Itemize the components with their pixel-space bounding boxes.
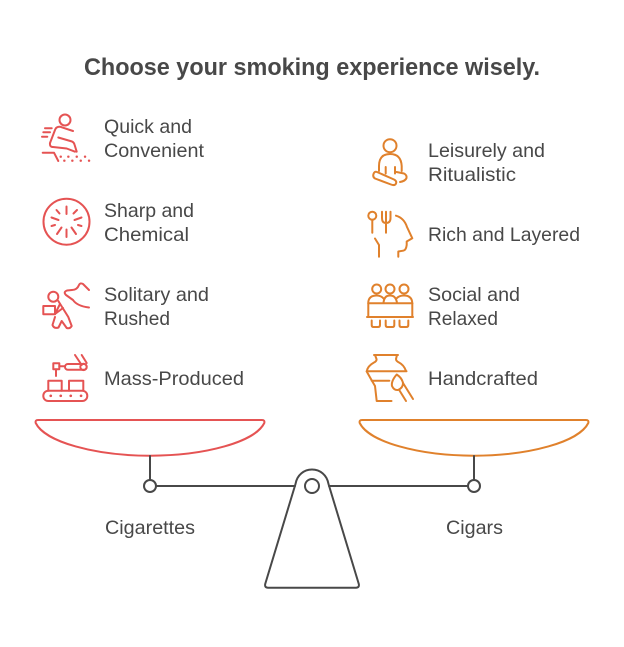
- text: solitary and rushed: Rushed: [104, 308, 170, 330]
- icon: rushed figure with box: [43, 283, 89, 328]
- text: social and relaxed: Relaxed: [428, 308, 498, 330]
- icon: conveyor with robot arm: [43, 355, 87, 401]
- scale: right pan: [360, 420, 588, 456]
- text: mass-produced: Mass-Produced: [104, 368, 244, 390]
- scale: beam and fulcrum: [144, 456, 480, 588]
- text: leisurely and ritualistic: [428, 140, 545, 186]
- text: quick and convenient: [104, 116, 205, 162]
- icon: head with spoon and fork: [368, 212, 412, 257]
- icon: sharp burst circle: [44, 199, 90, 245]
- title: Choose your smoking experience wisely.: [84, 54, 540, 81]
- text: sharp and chemical: Chemical: [104, 224, 189, 246]
- icon: people around table: [367, 284, 413, 327]
- text: sharp and chemical: Sharp and: [104, 200, 194, 222]
- text: rich and layered: Rich and Layered: [428, 224, 580, 246]
- text: quick and convenient: Convenient: [104, 140, 205, 162]
- label: cigars: Cigars: [446, 517, 503, 539]
- label: cigarettes: Cigarettes: [105, 517, 195, 539]
- text: solitary and rushed: [104, 284, 209, 330]
- text: quick and convenient: Quick and: [104, 116, 192, 138]
- text: social and relaxed: Social and: [428, 284, 520, 306]
- scale: left pan: [36, 420, 264, 456]
- text: sharp and chemical: [104, 200, 194, 246]
- text: social and relaxed: [428, 284, 520, 330]
- icon: running figure: [42, 114, 89, 161]
- icon: meditating figure: [373, 139, 407, 185]
- icon: vase with brush: [367, 355, 413, 401]
- text: leisurely and ritualistic: Ritualistic: [428, 164, 516, 186]
- text: handcrafted: Handcrafted: [428, 368, 538, 390]
- text: leisurely and ritualistic: Leisurely and: [428, 140, 545, 162]
- text: solitary and rushed: Solitary and: [104, 284, 209, 306]
